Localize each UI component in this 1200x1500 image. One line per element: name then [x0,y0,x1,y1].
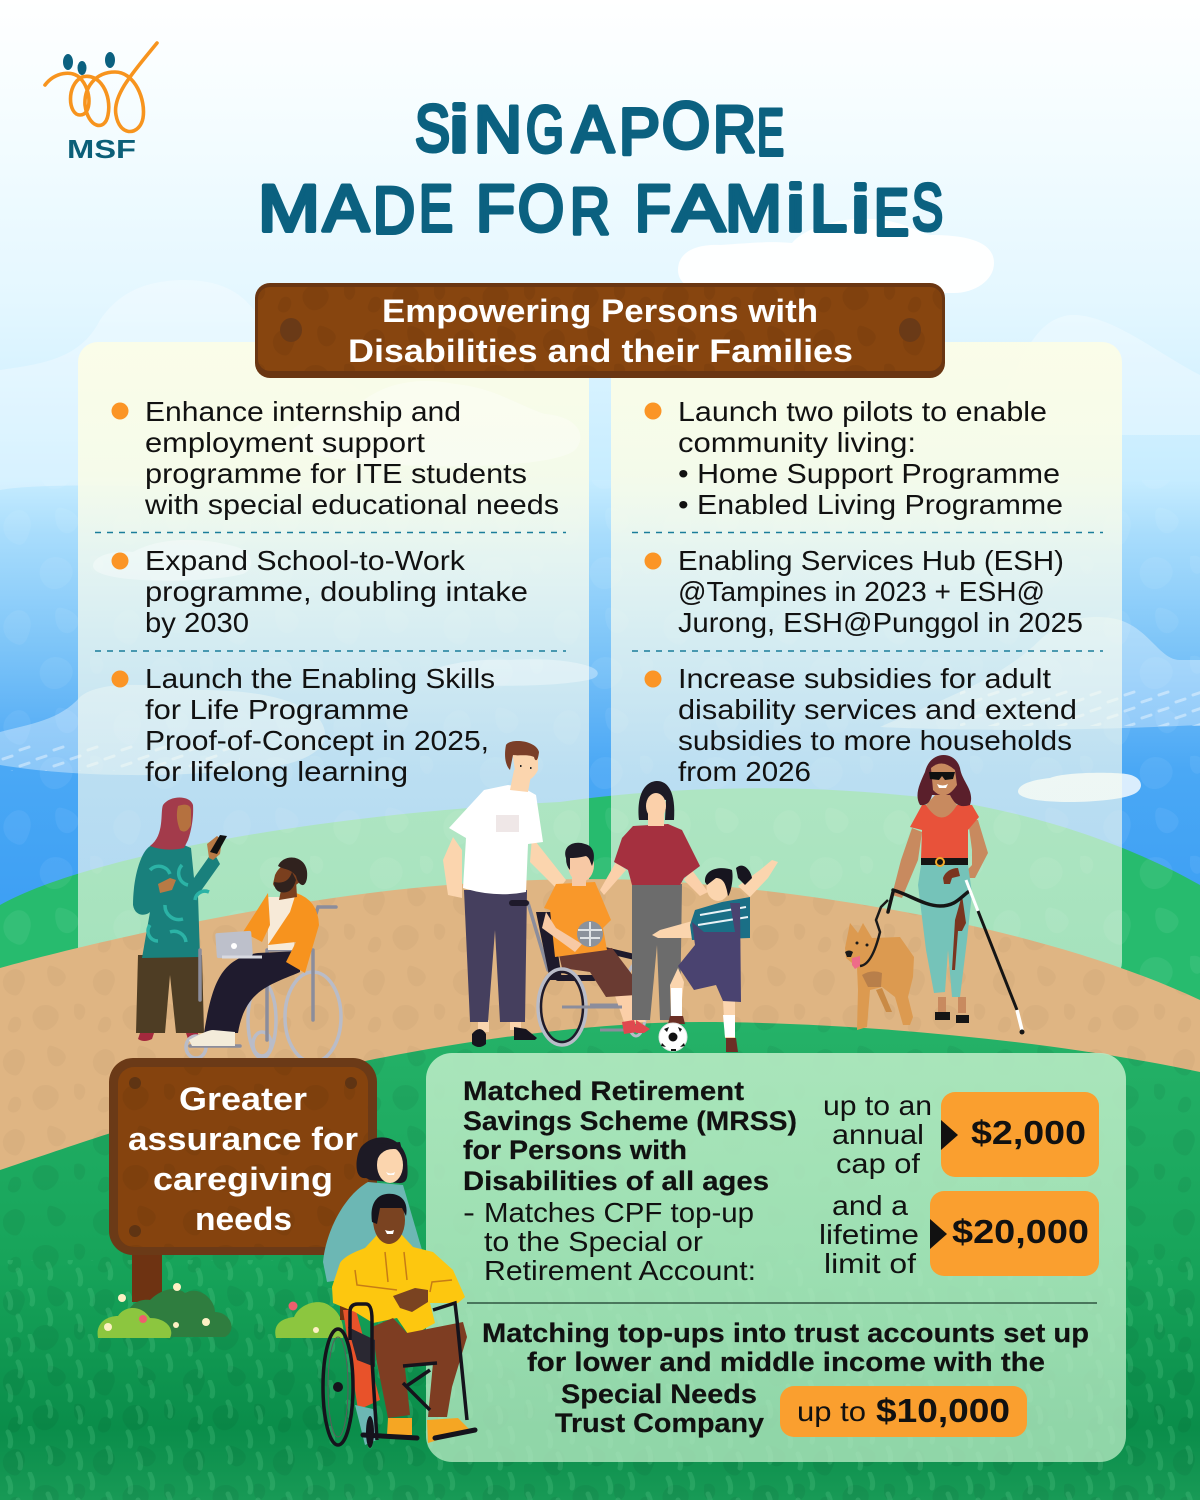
lifetime limit label: and a [832,1190,908,1221]
illustration: boy in wheelchair with ball [512,843,650,1045]
bullet 1: with special educational needs [144,489,559,520]
lifetime limit label: lifetime [819,1219,919,1250]
trust accounts text: Matching top-ups into trust accounts set up [482,1318,1089,1348]
annual cap label: up to an [823,1090,932,1121]
bullet 3 [112,663,495,787]
title: R [570,174,610,248]
path: tan walkway [0,879,1200,1200]
title [258,88,943,249]
sign: greater assurance for caregiving needs: assurance for [128,1121,358,1157]
bush: left [98,1283,232,1338]
sign: greater assurance for caregiving needs: Greater [179,1081,307,1117]
illustration: woman in hijab with phone [133,798,227,1041]
MRSS heading: for Persons with [463,1135,687,1165]
illustration: woman with white cane [888,755,1024,1034]
title: i [851,172,870,246]
title: A [673,171,725,245]
title: N [474,92,522,166]
MRSS heading [463,1076,797,1196]
sign: greater assurance for caregiving needs: needs [195,1201,292,1237]
annual cap label: cap of [836,1148,920,1179]
bullet 5: @Tampines in 2023 + ESH@ [678,576,1045,607]
title: M [258,171,320,245]
bullet 5: Jurong, ESH@Punggol in 2025 [678,607,1083,638]
bullet 6: Increase subsidies for adult [678,663,1051,694]
bullets: right column [632,396,1103,787]
bullet 4: • Enabled Living Programme [678,489,1063,520]
sign: greater assurance for caregiving needs: caregiving [153,1161,333,1197]
title: P [619,94,660,168]
bullet 4 [644,396,1063,520]
title: A [572,92,614,166]
clouds behind panels [0,219,1200,802]
trust accounts text: for lower and middle income with the [527,1347,1045,1377]
illustration: caregiver pushing man in wheelchair [323,1137,475,1448]
illustration: standing man in white t-shirt [443,741,566,1047]
bullet 2: programme, doubling intake [145,576,528,607]
callout: $2,000: $2,000 [971,1114,1086,1151]
bullet 6: from 2026 [678,756,811,787]
MRSS description: to the Special or [484,1226,703,1257]
trust accounts text: Special Needs [561,1379,757,1409]
title: R [713,92,756,166]
bullet 3: for Life Programme [145,694,409,725]
heading banner: wood sign: Empowering Persons with [382,293,818,329]
title: L [810,171,847,245]
clouds over panels [93,381,598,686]
bullet 6 [644,663,1077,787]
title: i [449,92,469,166]
panel: left background [78,342,589,982]
bullet 6: subsidies to more households [678,725,1072,756]
bullet 2 [112,545,528,638]
title: i [786,171,805,245]
bullet 1: Enhance internship and [145,396,461,427]
bullet 1 [112,396,559,520]
title: O [518,171,564,245]
title: M [725,171,782,245]
trust accounts text [482,1318,1089,1438]
illustration: soccer ball [659,1023,687,1051]
MRSS description: - [463,1197,475,1228]
title: F [635,171,671,245]
foreground grass [0,1022,1200,1500]
bullets: left column [95,396,566,787]
callout: $2,000 [941,1092,1099,1177]
callout: up to $10,000: up to [797,1396,866,1427]
MRSS heading: Matched Retirement [463,1076,744,1106]
bullet 5 [644,545,1083,638]
MRSS heading: Disabilities of all ages [463,1166,769,1196]
heading banner: wood sign: Disabilities and their Families [348,333,853,369]
trust accounts text: Trust Company [555,1408,764,1438]
sign: greater assurance for caregiving needs [109,1058,377,1302]
MRSS description: Retirement Account: [484,1255,756,1286]
lifetime limit label [819,1190,919,1279]
title: E [419,171,453,245]
title: D [373,173,415,247]
bullet 4: Launch two pilots to enable [678,396,1047,427]
bullet 3: Launch the Enabling Skills [145,663,495,694]
bullet 2: by 2030 [145,607,249,638]
bullet 1: programme for ITE students [145,458,527,489]
illustration: woman in maroon top [600,781,708,1020]
illustration: girl with soccer ball [652,860,778,1052]
bush: right [275,1302,343,1338]
title: A [323,171,369,245]
lifetime limit label: limit of [824,1248,916,1279]
title: E [757,95,784,169]
title: G [526,92,564,166]
panel: MRSS and trust account details [426,1053,1126,1462]
bullet 5: Enabling Services Hub (ESH) [678,545,1064,576]
title: F [476,171,515,245]
callout: $20,000 [930,1191,1099,1276]
bullet 6: disability services and extend [678,694,1077,725]
MRSS description [463,1197,756,1286]
heading banner: wood sign [255,283,945,378]
illustration: man in wheelchair with laptop [186,858,341,1062]
title: O [662,88,710,162]
bullet 1: employment support [145,427,425,458]
bullet 3: Proof-of-Concept in 2025, [145,725,489,756]
panel: right background [611,342,1122,982]
MRSS heading: Savings Scheme (MRSS) [463,1106,797,1136]
annual cap label [823,1090,932,1179]
logo: MSF [45,43,157,164]
callout: up to $10,000: $10,000 [876,1392,1010,1429]
hill behind panels [0,788,1200,1050]
title: S [415,91,450,165]
callout: $20,000: $20,000 [952,1213,1089,1250]
callout: up to $10,000 [780,1386,1027,1437]
bullet 2: Expand School-to-Work [145,545,466,576]
bullet 4: • Home Support Programme [678,458,1060,489]
MRSS description: Matches CPF top-up [484,1197,754,1228]
logo: MSF: MSF [67,134,136,164]
annual cap label: annual [832,1119,924,1150]
bullet 4: community living: [678,427,916,458]
illustration: guide dog [845,900,914,1030]
bullet 3: for lifelong learning [145,756,408,787]
title: E [874,175,909,249]
title: S [912,170,943,244]
